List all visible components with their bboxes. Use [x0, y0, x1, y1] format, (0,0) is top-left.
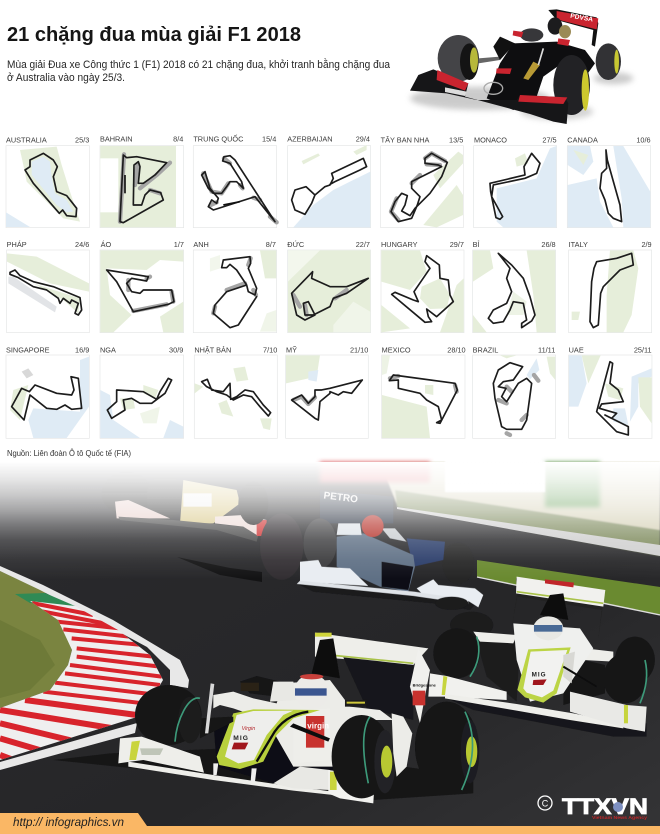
footer bar	[0, 813, 660, 834]
panel: Áo: 1/7	[174, 240, 184, 249]
panel: UAE: UAE	[569, 346, 584, 355]
panel: Nhật Bản	[194, 346, 277, 438]
haze overlay	[0, 462, 660, 580]
panel: Singapore: SINGAPORE	[6, 346, 50, 355]
panel: Đức	[287, 240, 371, 333]
panel: Italy: 2/9	[641, 240, 652, 249]
panel: Hungary: 29/7	[450, 240, 464, 249]
panel: Italy	[569, 240, 652, 333]
logo: TTXVN copyright	[538, 794, 648, 820]
panel: Mỹ: 21/10	[350, 346, 368, 355]
panel: Australia: AUSTRALIA	[6, 135, 47, 144]
panel: Tây Ban Nha: TÂY BAN NHA	[381, 135, 430, 144]
panel: Monaco	[474, 135, 557, 228]
panel: Azerbaijan: AZERBAIJAN	[287, 135, 333, 144]
panel: Bahrain: BAHRAIN	[100, 135, 133, 144]
icon: Lotus F1 car	[410, 9, 633, 124]
panel: Hungary: HUNGARY	[381, 240, 418, 249]
icon: Lotus F1 car: PDVSA	[570, 13, 594, 24]
panel: Tây Ban Nha	[381, 135, 463, 228]
logo: TTXVN copyright: TTXVN	[562, 794, 648, 819]
panel: Áo	[100, 240, 184, 333]
main Brawn car: MIG	[347, 781, 363, 791]
panel: Mexico: 28/10	[447, 346, 466, 355]
panel: Singapore: 16/9	[75, 346, 89, 355]
right-side grass strip	[477, 560, 660, 615]
panel: Australia: 25/3	[75, 135, 89, 144]
panel: Đức: 22/7	[356, 240, 370, 249]
website url: http:// infographics.vn	[13, 817, 124, 829]
panel: Bỉ	[473, 240, 556, 333]
upper background grass and barrier	[320, 462, 660, 556]
panel: Tây Ban Nha: 13/5	[449, 135, 463, 144]
panel: Nhật Bản: NHẬT BẢN	[194, 346, 231, 355]
title: 21 chặng đua mùa giải F1 2018	[7, 24, 301, 46]
panel: Anh: ANH	[193, 240, 209, 249]
panel: Áo: ÁO	[101, 240, 112, 249]
panel: Đức: ĐỨC	[287, 240, 305, 249]
panel: Nga	[100, 346, 184, 438]
left grass	[0, 571, 72, 708]
panel: Australia	[6, 135, 89, 228]
panel: Italy: ITALY	[569, 240, 588, 249]
panel: Pháp: PHÁP	[7, 240, 27, 249]
panel: Azerbaijan: 29/4	[356, 135, 370, 144]
kerb outer white band	[0, 566, 189, 688]
intro text: Mùa giải Đua xe Công thức 1 (F1) 2018 có 21 chặng đua, khởi tranh bằng chặng đua	[7, 58, 390, 71]
main Brawn car: virgin	[307, 721, 329, 730]
panel: Canada: CANADA	[567, 135, 598, 144]
panel: Bỉ: 26/8	[541, 240, 556, 249]
panel: Monaco: 27/5	[542, 135, 557, 144]
green kerb paint	[15, 593, 75, 606]
panel: Canada	[567, 135, 651, 228]
panel: Nhật Bản: 7/10	[263, 346, 277, 355]
panel: Brazil: 11/11	[538, 346, 555, 355]
williams car: PETRO	[323, 490, 359, 506]
panel: Trung Quốc: 15/4	[262, 135, 276, 144]
intro text: ở Australia vào ngày 25/3.	[7, 72, 125, 84]
dark road shadow streak	[177, 557, 262, 582]
panel: Bahrain	[100, 135, 184, 228]
panel: Bỉ: BỈ	[473, 240, 480, 249]
renault car in background	[102, 472, 268, 542]
panel: Brazil	[473, 346, 556, 438]
panel: Canada: 10/6	[636, 135, 651, 144]
source note: Nguồn: Liên đoàn Ô tô Quốc tế (FIA)	[7, 448, 131, 458]
panel: Pháp: 24/6	[75, 240, 89, 249]
second Brawn car	[428, 577, 655, 737]
panel: UAE	[569, 346, 652, 438]
main Brawn car: Bridgestone	[413, 683, 437, 688]
logo: TTXVN copyright: C	[542, 798, 549, 808]
williams car	[260, 490, 483, 610]
panel: Mexico: MEXICO	[382, 346, 411, 355]
panel: Nga: NGA	[100, 346, 116, 355]
main Brawn car: MIG	[233, 735, 249, 742]
second Brawn car: MIG	[532, 672, 547, 679]
panel: Hungary	[381, 240, 464, 333]
main Brawn car: Virgin	[242, 726, 255, 732]
panel: Bahrain: 8/4	[173, 135, 183, 144]
red and white kerb	[0, 601, 163, 760]
panel: Nga: 30/9	[169, 346, 183, 355]
panel: Anh: 8/7	[266, 240, 276, 249]
panel: Singapore	[6, 346, 89, 438]
track asphalt	[0, 462, 660, 834]
panel: Brazil: BRAZIL	[473, 346, 498, 355]
logo: TTXVN copyright: Vietnam News Agency	[592, 815, 647, 820]
panel: Trung Quốc	[193, 134, 277, 228]
panel: UAE: 25/11	[634, 346, 652, 355]
panel: Azerbaijan	[287, 135, 371, 228]
panel: Anh	[193, 240, 277, 333]
panel: Monaco: MONACO	[474, 135, 507, 144]
main Brawn car	[53, 633, 479, 803]
photo: Formula 1 race on track	[0, 462, 660, 834]
intro text	[7, 58, 390, 84]
panel: Pháp	[7, 240, 89, 333]
panel: Trung Quốc: TRUNG QUỐC	[193, 134, 244, 144]
panel: Mỹ: MỸ	[286, 346, 297, 355]
panel: Mexico	[382, 346, 466, 438]
panel: Mỹ	[286, 346, 368, 438]
